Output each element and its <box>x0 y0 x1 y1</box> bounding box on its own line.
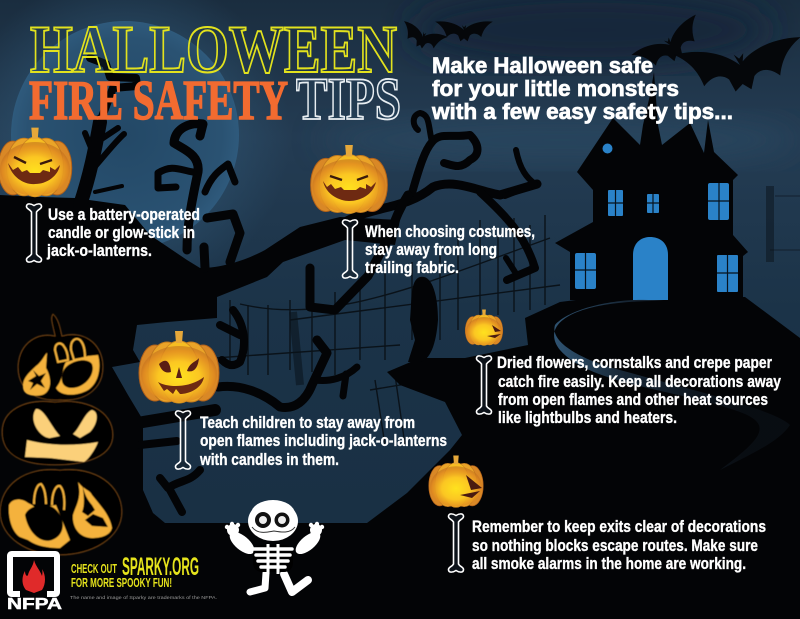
graveyard fence <box>215 186 800 445</box>
Sparky link callout: SPARKY.ORG <box>122 553 199 581</box>
moon <box>0 0 290 300</box>
winding road <box>554 300 790 470</box>
tip 2: When choosing costumes, <box>365 223 535 241</box>
title: HALLOWEEN <box>30 11 397 87</box>
intro text: with a few easy safety tips... <box>431 99 733 124</box>
skeleton head <box>248 500 298 541</box>
tip 5 <box>448 514 766 573</box>
stencil: top pumpkin <box>18 314 103 400</box>
tip 4: like lightbulbs and heaters. <box>498 409 677 427</box>
tip 3: open flames including jack-o-lanterns <box>200 432 447 450</box>
stencil: middle pumpkin <box>2 401 113 465</box>
house windows <box>575 144 738 292</box>
title: TIPS <box>296 66 401 132</box>
pumpkin 3 <box>139 331 219 403</box>
tip 4 <box>476 354 782 427</box>
pumpkin stencil stack <box>0 314 122 555</box>
tip 3: Teach children to stay away from <box>200 414 415 432</box>
tip 1: candle or glow-stick in <box>48 224 195 242</box>
stencil: bottom pumpkin <box>0 469 122 555</box>
tip 5: all smoke alarms in the home are working. <box>472 555 746 573</box>
black cat silhouette <box>408 277 438 362</box>
Sparky link callout <box>70 553 217 600</box>
door <box>633 237 668 300</box>
title <box>29 11 401 132</box>
bats <box>397 14 800 99</box>
window panes <box>575 183 738 292</box>
intro text <box>431 53 733 124</box>
skeleton arms and hands <box>225 522 324 558</box>
tip 3: with candles in them. <box>199 451 339 469</box>
Sparky link callout: FOR MORE SPOOKY FUN! <box>71 575 172 590</box>
intro text: Make Halloween safe <box>432 53 653 78</box>
Sparky link callout: CHECK OUT <box>71 561 117 576</box>
black ground silhouette <box>0 195 800 619</box>
skeleton ribcage <box>253 544 293 574</box>
tip 2: trailing fabric. <box>365 259 459 277</box>
tip 2 <box>342 220 535 278</box>
NFPA logo: NFPA <box>7 596 63 613</box>
tip 1: Use a battery-operated <box>48 206 200 224</box>
tip 3 <box>175 411 447 469</box>
Sparky link callout: The name and image of Sparky are trademarks of the NFPA. <box>70 595 217 600</box>
trees: bare curling branches <box>80 58 537 512</box>
tip 2: stay away from long <box>365 241 497 259</box>
pumpkin 1 <box>0 128 72 197</box>
NFPA logo <box>7 551 63 613</box>
pumpkin 5 <box>429 455 483 507</box>
skeleton mascot <box>225 500 324 592</box>
tip 1 <box>26 204 200 262</box>
title: FIRE SAFETY <box>29 70 288 132</box>
haunted house <box>555 72 748 300</box>
tip 1: jack-o-lanterns. <box>46 242 152 260</box>
pumpkin 2 <box>311 145 387 213</box>
pumpkin 4 <box>465 310 503 346</box>
skeleton legs <box>250 573 308 592</box>
intro text: for your little monsters <box>432 76 679 101</box>
